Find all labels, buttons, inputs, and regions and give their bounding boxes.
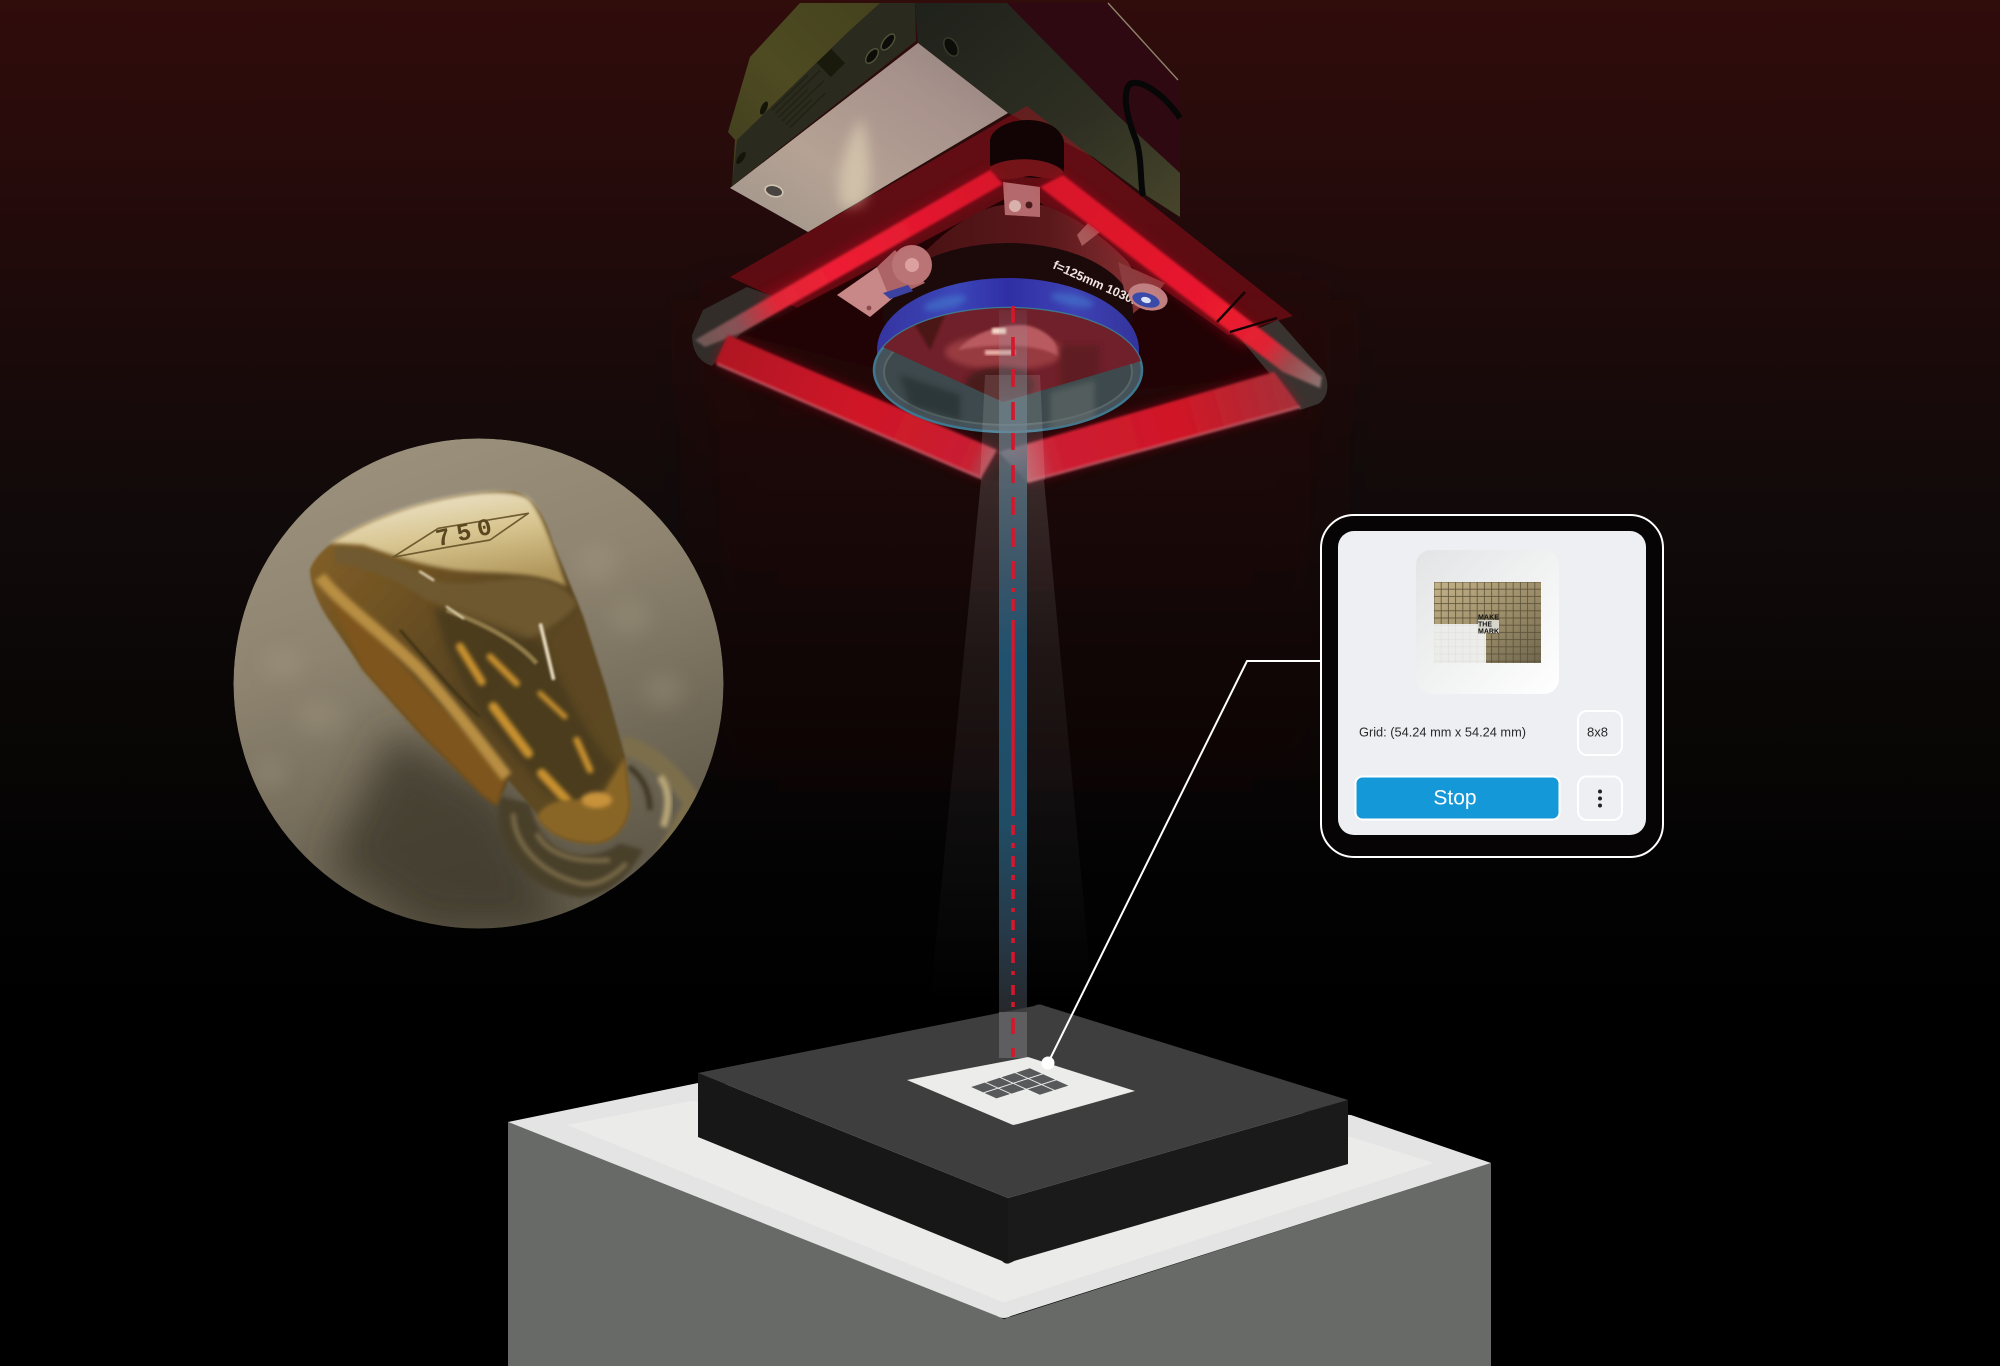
- left side camera module: [837, 245, 932, 317]
- cable: [1126, 83, 1180, 196]
- pink soft edges: [717, 364, 1300, 482]
- specular streaks: [420, 572, 553, 678]
- platform top: [698, 1004, 1348, 1198]
- illumination cone: [930, 480, 1093, 1002]
- lens glass: [874, 308, 1142, 432]
- leader anchor dot: [1042, 1056, 1054, 1070]
- stop button: Stop: [1433, 786, 1477, 810]
- laser beam column: [999, 310, 1027, 1058]
- dark interior of ring light: [745, 190, 1285, 402]
- silver bottom face: [730, 43, 1008, 232]
- bottom left bar: [715, 335, 997, 478]
- medallion background: [234, 438, 724, 928]
- white marking plate: [907, 1057, 1135, 1125]
- lower glass lightness: [900, 375, 1095, 430]
- grid selector button: [1578, 711, 1622, 755]
- small fitting on barrel: [1077, 223, 1100, 246]
- left olive face: [728, 3, 915, 186]
- cable crossing bar: [1217, 292, 1277, 332]
- pendant body: [310, 491, 630, 843]
- dark band along silver edge: [732, 3, 916, 186]
- blue lens ring: [877, 278, 1139, 422]
- pendant shaded centre: [433, 607, 617, 807]
- pedestal: [508, 1083, 1491, 1366]
- silver reflection highlight: [839, 118, 870, 208]
- top right bar: [1040, 175, 1322, 388]
- bottom right bar: [999, 372, 1300, 482]
- lens barrel assembly: [837, 182, 1171, 381]
- thumbnail marked sample: MARK: [1478, 628, 1499, 636]
- red neck base: [990, 159, 1064, 179]
- chain lower links: [498, 797, 643, 897]
- chain right link: [622, 745, 693, 860]
- blurred background mottling: [313, 612, 676, 724]
- rear dark red panel: [1007, 3, 1180, 180]
- red ambient glow behind ring light: [700, 300, 1330, 940]
- thin rear edge highlight: [1108, 3, 1178, 80]
- background shadow: [330, 730, 560, 930]
- beam landing overlay on platform: [999, 1012, 1027, 1058]
- bracket: [1003, 182, 1040, 217]
- red dashed laser line: [1011, 306, 1015, 1057]
- gold engraved streaks: [460, 647, 590, 800]
- red bar glow: [715, 170, 1300, 482]
- mounting holes: [735, 32, 961, 199]
- grid selector button: 8x8: [1587, 724, 1608, 740]
- callout outer frame: [1321, 515, 1663, 857]
- callout panel: [1321, 515, 1663, 857]
- red-tinted reflection region: [884, 308, 1140, 402]
- magnified gold pendant medallion: [234, 438, 724, 930]
- grid size label: Grid: (54.24 mm x 54.24 mm): [1359, 724, 1526, 740]
- curved strand: [447, 610, 537, 663]
- barrel body: [922, 205, 1150, 340]
- corner caps and grey lower ends of top bars: [692, 287, 1327, 410]
- rim dark line: [400, 630, 480, 717]
- grid of marked cells: [971, 1068, 1068, 1098]
- front lens: [870, 278, 1150, 432]
- callout inner card: [1338, 531, 1646, 835]
- dark work platform: [698, 1004, 1348, 1264]
- callout leader line: [1042, 661, 1321, 1070]
- product label and QR code: [770, 49, 851, 128]
- cyan glints on ring: [922, 290, 1095, 314]
- thumbnail marked sample: THE: [1478, 622, 1492, 628]
- pedestal inner top: [567, 1101, 1434, 1302]
- black neck above ring: [990, 120, 1064, 179]
- lens specification text: f=125mm 1030nm: [1051, 258, 1152, 313]
- top left bar: [695, 170, 1003, 347]
- speckled dark zone: [335, 547, 577, 643]
- translucent red plane: [730, 106, 1293, 402]
- more options button: [1578, 776, 1622, 820]
- laser head camera housing: [728, 3, 1180, 232]
- right side lamp: [1118, 262, 1171, 315]
- lens-side cone: [980, 375, 1045, 480]
- black barrel ring: [883, 243, 1133, 381]
- platform right side: [1008, 1100, 1348, 1263]
- top polished facet: [330, 492, 567, 587]
- thumbnail card: [1416, 550, 1559, 694]
- hallmark outline: [393, 513, 528, 557]
- platform left side: [698, 1073, 1010, 1264]
- bottom knot: [537, 757, 630, 843]
- thumbnail marked sample: [1434, 582, 1541, 663]
- inner glass rim: [884, 319, 1132, 425]
- light rim strip: [320, 577, 507, 777]
- right dark face: [915, 3, 1180, 217]
- sample marking text: MAKE: [1478, 614, 1499, 622]
- pedestal side: [508, 1122, 1491, 1366]
- pedestal top: [508, 1083, 1491, 1318]
- hallmark number: 750: [434, 515, 495, 554]
- ring light bars: [695, 170, 1322, 482]
- brown band of inner opening: [330, 600, 507, 805]
- stop button: [1356, 776, 1560, 820]
